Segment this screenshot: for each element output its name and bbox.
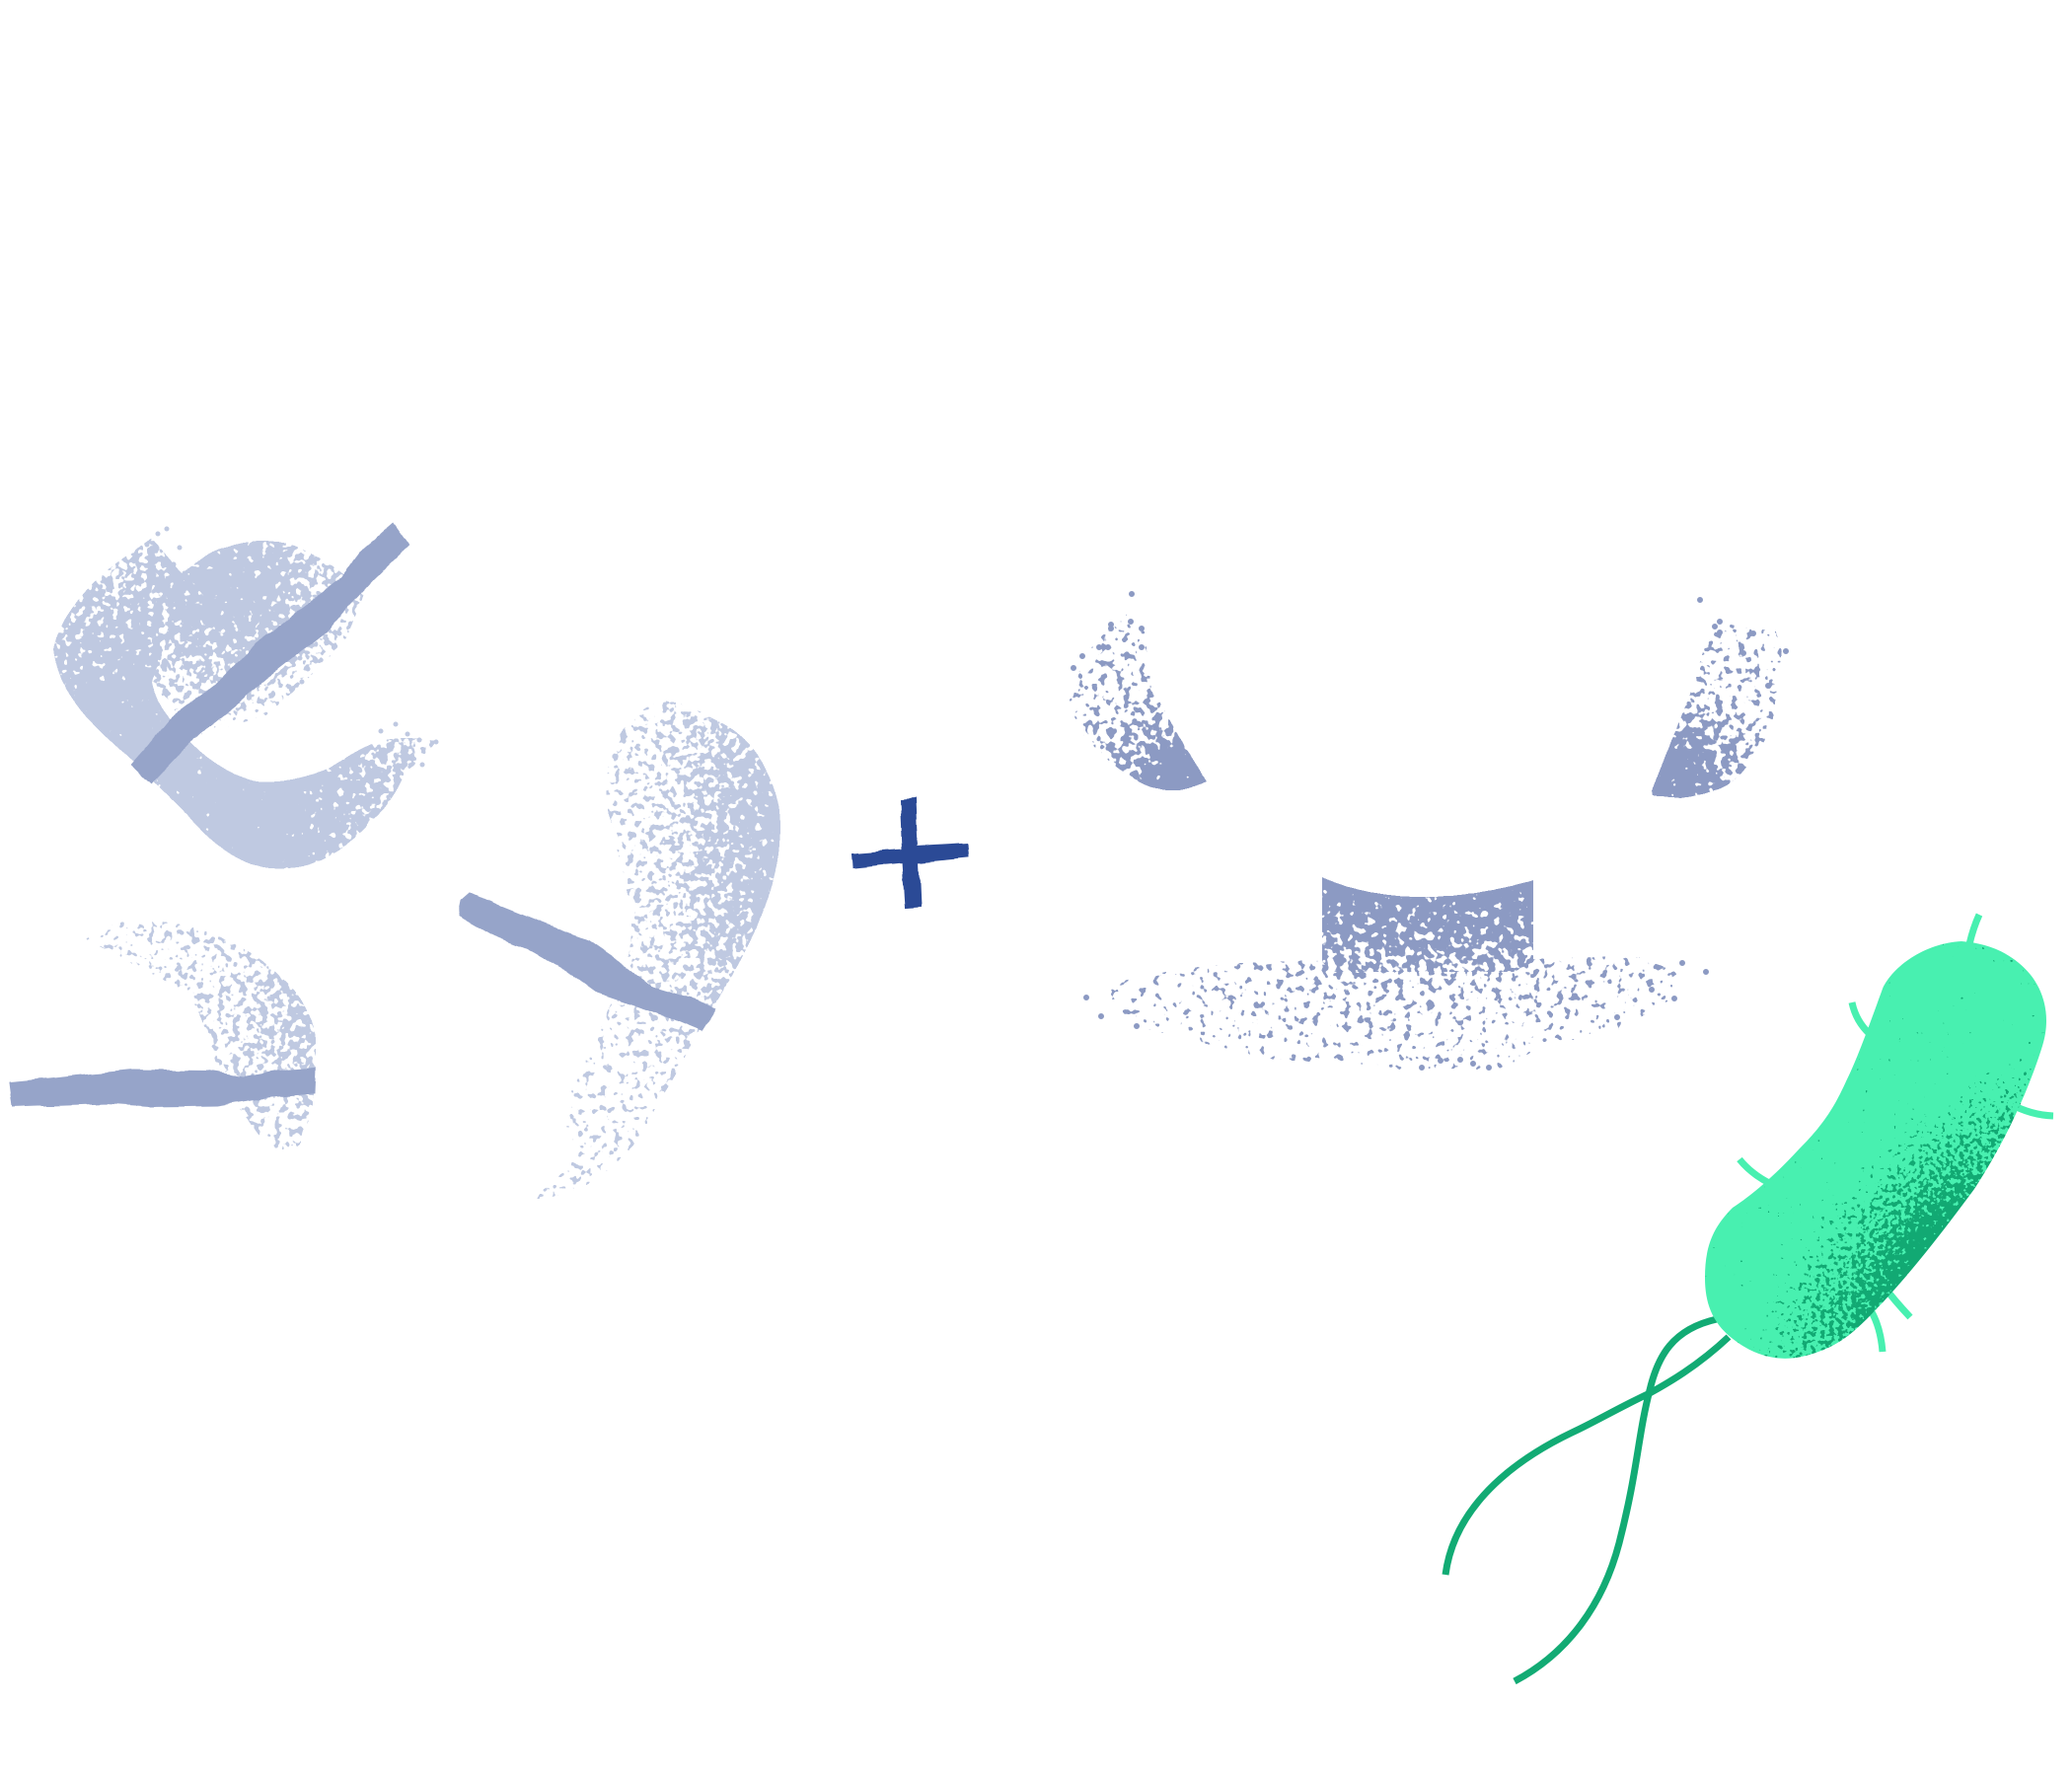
fragment outlying dots xyxy=(1700,600,1786,686)
body stipple shading xyxy=(1697,937,2052,1367)
brim stipple xyxy=(1105,955,1677,1072)
slanted bar over lobe xyxy=(460,894,715,1030)
flagellum strand one xyxy=(1445,1337,1729,1575)
stippled fragment: right xyxy=(1650,600,1786,798)
stippled fragment: central brim xyxy=(1086,955,1706,1072)
bacterium structure group: right cross-section xyxy=(460,701,780,1199)
bacterium body xyxy=(1705,941,2046,1359)
stippled hook: lower and left lobe xyxy=(53,555,436,868)
fragment stipple xyxy=(1650,622,1782,798)
plus sign xyxy=(852,799,968,908)
stippled fragment: central neck xyxy=(1322,877,1533,972)
stippled tall lobe xyxy=(530,701,780,1199)
brim outlying dots xyxy=(1086,963,1706,1068)
scattered outlying dots xyxy=(147,529,436,765)
fragment outlying dots xyxy=(1073,594,1142,668)
pili xyxy=(1739,915,2053,1352)
horizontal bar over lobe xyxy=(11,1069,315,1106)
diagonal bar over upper lobe xyxy=(132,525,407,782)
bacterium structure group: bottom-left cross-section xyxy=(11,921,316,1151)
flagellum strand two xyxy=(1515,1319,1717,1681)
illustration canvas xyxy=(10,523,2054,1685)
stippled upper lobe xyxy=(128,538,367,735)
bacterium xyxy=(1445,915,2053,1681)
stippled quarter lobe xyxy=(86,921,316,1151)
stippled fragment: left xyxy=(1067,594,1207,790)
bacterium structure group: top-left cross-section xyxy=(53,525,436,868)
fragment stipple xyxy=(1067,612,1207,790)
